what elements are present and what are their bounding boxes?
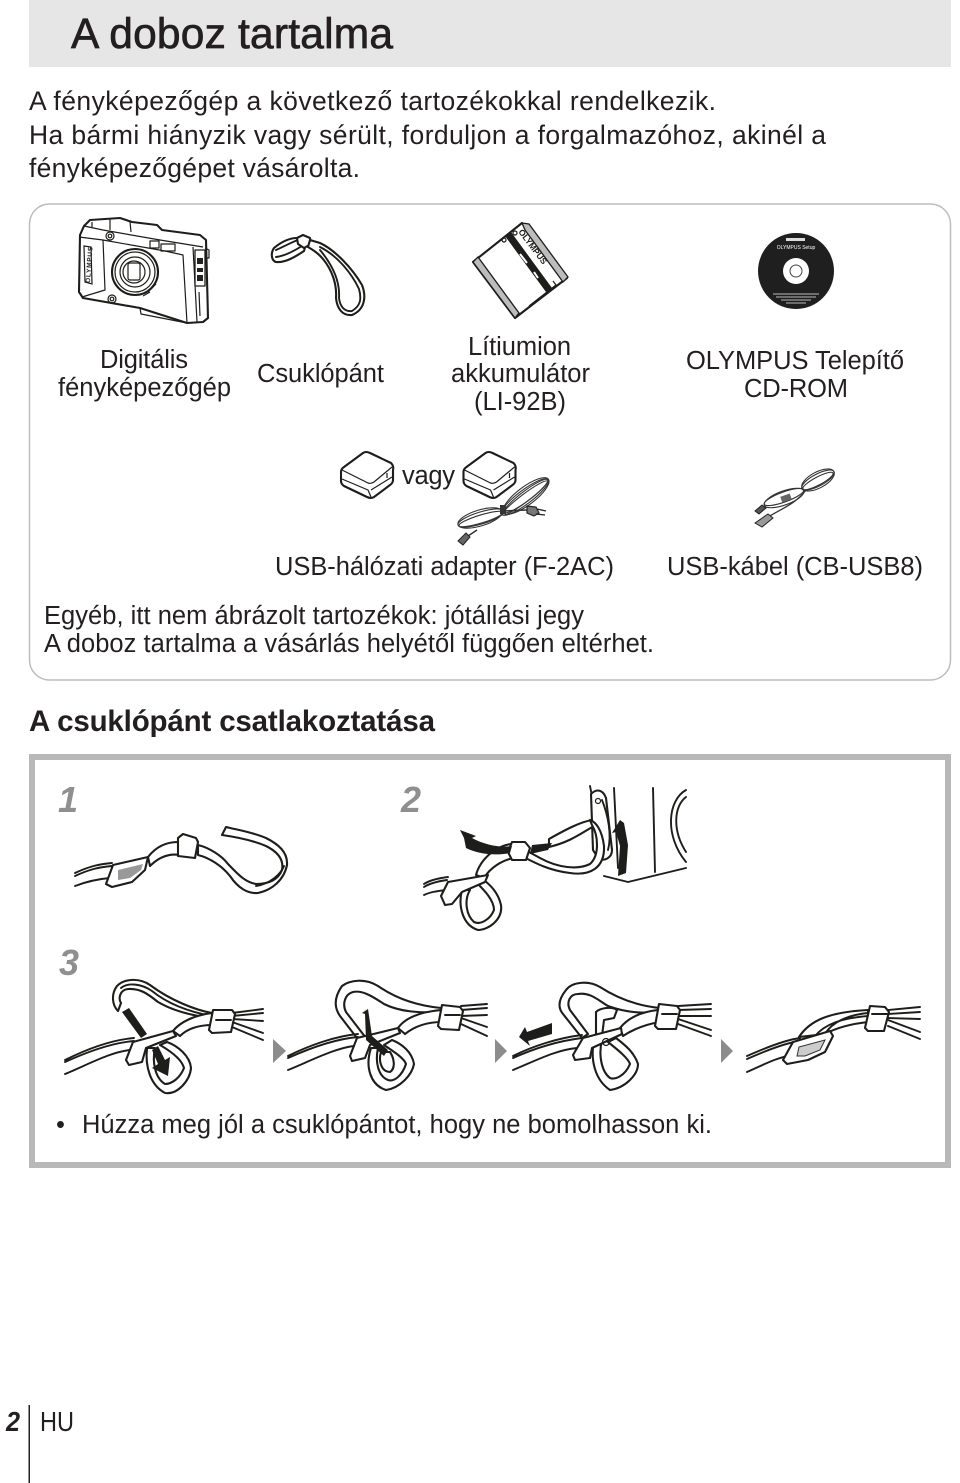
- illustration: step 3, second: [288, 981, 487, 1090]
- bullet text: •: [56, 1111, 65, 1139]
- title band: A doboz tartalma: [71, 11, 393, 58]
- bullet text: Húzza meg jól a csuklópántot, hogy ne bomolhasson ki.: [82, 1111, 712, 1139]
- labels: items: (LI-92B): [474, 388, 566, 416]
- illustration: step 3, third: [513, 983, 711, 1090]
- labels: items: Csuklópánt: [257, 360, 384, 388]
- illustration: step 3, first: [65, 980, 263, 1093]
- labels: adapter and cable: USB-kábel (CB-USB8): [667, 553, 923, 581]
- note text: A doboz tartalma a vásárlás helyétől függően eltérhet.: [44, 630, 654, 658]
- icon: digital camera: [79, 218, 209, 323]
- labels: adapter and cable: [275, 553, 923, 581]
- page footer: 2: [5, 1406, 20, 1437]
- icon: USB power adapter with cord: [456, 452, 554, 545]
- intro text: fényképezőgépet vásárolta.: [29, 153, 360, 183]
- illustration: step 2: [424, 786, 686, 930]
- step number 3: 3: [59, 942, 79, 983]
- labels: items: fényképezőgép: [58, 374, 231, 402]
- step number 1: 1: [58, 779, 78, 820]
- panel: strap instructions: [32, 757, 948, 1165]
- illustration: step 3, fourth: [747, 1006, 920, 1072]
- labels: items: Digitális: [100, 346, 188, 374]
- icon: USB power adapter: [341, 452, 393, 498]
- labels: items: [58, 333, 904, 416]
- arrow: next: [721, 1039, 733, 1063]
- icon: battery: OLYMPUS: [516, 227, 549, 266]
- page footer: HU: [40, 1406, 74, 1437]
- icon: wrist strap: [272, 235, 364, 315]
- note text: Egyéb, itt nem ábrázolt tartozékok: jótállási jegy: [44, 602, 584, 630]
- heading: attaching the strap: A csuklópánt csatlakoztatása: [29, 705, 436, 738]
- arrow: next: [273, 1039, 286, 1063]
- labels: items: akkumulátor: [451, 360, 590, 388]
- icon: CD-ROM: [758, 233, 834, 309]
- label: or: vagy: [402, 462, 455, 490]
- arrow: next: [495, 1039, 507, 1063]
- note text: [44, 602, 654, 658]
- intro text: Ha bármi hiányzik vagy sérült, forduljon a forgalmazóhoz, akinél a: [29, 120, 826, 150]
- icon: battery: [473, 223, 568, 318]
- labels: items: OLYMPUS Telepítő: [686, 347, 904, 375]
- panel: box contents: [30, 204, 950, 680]
- icon: CD-ROM: OLYMPUS Setup: [777, 245, 815, 251]
- icon: USB cable: [755, 464, 838, 527]
- step number 2: 2: [400, 779, 421, 820]
- icon: digital camera: OLYMPUS: [85, 246, 95, 283]
- labels: items: Lítiumion: [468, 333, 571, 361]
- labels: adapter and cable: USB-hálózati adapter (F-2AC): [275, 553, 614, 581]
- intro text: [29, 86, 826, 183]
- title band: [29, 0, 951, 67]
- intro text: A fényképezőgép a következő tartozékokkal rendelkezik.: [29, 86, 716, 116]
- illustration: step 1: [75, 827, 287, 893]
- page footer: [5, 1405, 74, 1483]
- labels: items: CD-ROM: [744, 375, 848, 403]
